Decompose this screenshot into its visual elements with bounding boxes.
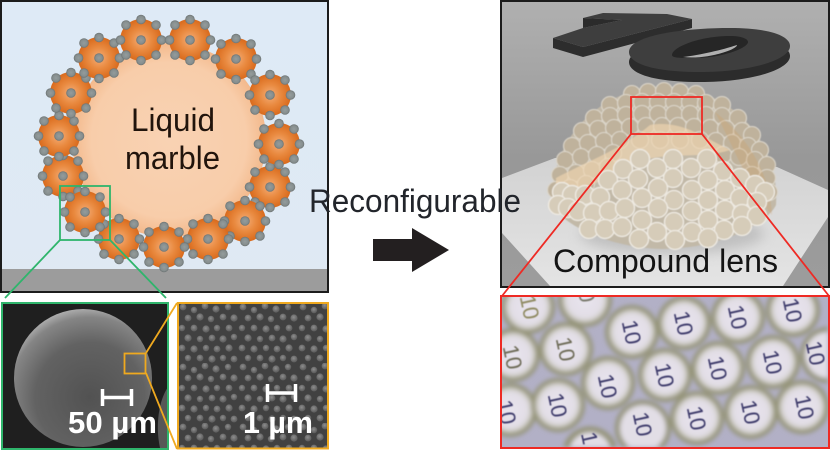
front microlenses (548, 150, 774, 250)
magnified 10 labels: 10 (790, 393, 819, 422)
magnified 10 labels: 10 (682, 404, 711, 433)
label: compound lens: Compound lens (553, 243, 778, 279)
callout: green zoom box and lines (5, 186, 166, 298)
magnified 10 labels: 10 (723, 303, 752, 332)
SEM frame (2, 303, 168, 449)
panel: photo through compound lens (500, 295, 830, 449)
digit 1 (553, 13, 692, 57)
label: liquid marble: Liquid (131, 102, 215, 138)
number 10 object (553, 13, 790, 82)
panel: nanostructure SEM image (178, 303, 328, 448)
magnified 10 labels: 10 (571, 276, 600, 305)
callout: red zoom box and lines (502, 97, 829, 296)
photo frame (501, 296, 829, 448)
magnified 10 labels: 10 (543, 391, 572, 420)
magnified 10 labels: 1 (576, 430, 603, 447)
substrate (2, 269, 327, 291)
glass plate (502, 158, 828, 286)
magnified 10 labels: 10 (703, 354, 732, 383)
orange refraction band (556, 124, 730, 205)
magnified 10 labels: 10 (593, 372, 622, 401)
ring of coated particles (34, 15, 304, 272)
scale bar: 50 µm (102, 389, 132, 406)
label: liquid marble (125, 102, 220, 176)
dome shadow (580, 214, 764, 254)
magnified 10 labels: 10 (778, 296, 807, 325)
magnified 10 labels: 10 (628, 410, 657, 439)
magnified 10 labels: 10 (492, 398, 521, 427)
liquid marble droplet (72, 43, 266, 237)
magnified 10 labels: 10 (758, 348, 787, 377)
scale bar: 1 µm (267, 384, 296, 402)
rear microlenses (548, 82, 778, 200)
magnified 10 labels (502, 297, 826, 446)
magnified 10 labels: 10 (669, 309, 698, 338)
panel: compound lens render (501, 1, 829, 287)
magnified 10 labels: 10 (736, 398, 765, 427)
digit 0 (629, 28, 790, 82)
panel: SEM image of particle (2, 303, 168, 449)
compound lens dome (548, 82, 778, 250)
microlens images (502, 297, 828, 447)
nanostructure texture (178, 303, 328, 448)
panel background (1, 1, 328, 292)
photo background (501, 296, 829, 448)
scale label: 1 µm: 1 µm (243, 405, 313, 440)
magnified 10 labels: 10 (617, 318, 646, 347)
label: liquid marble: marble (125, 140, 220, 176)
magnified 10 labels: 10 (515, 293, 544, 322)
callout: orange zoom box and lines (124, 303, 177, 449)
magnified 10 labels: 10 (650, 361, 679, 390)
scale label: 50 µm: 50 µm (68, 405, 157, 440)
SEM spheres (14, 309, 168, 448)
magnified 10 labels: 10 (551, 335, 580, 364)
panel: liquid marble schematic (1, 1, 328, 292)
SEM background (2, 303, 168, 449)
arrow (373, 228, 449, 272)
dome body (553, 87, 776, 249)
orange tint, right side (715, 112, 772, 215)
render background (501, 1, 829, 287)
magnified 10 labels: 10 (498, 343, 527, 372)
magnified 10 labels: 10 (801, 339, 830, 368)
label: reconfigurable: Reconfigurable (309, 183, 521, 219)
